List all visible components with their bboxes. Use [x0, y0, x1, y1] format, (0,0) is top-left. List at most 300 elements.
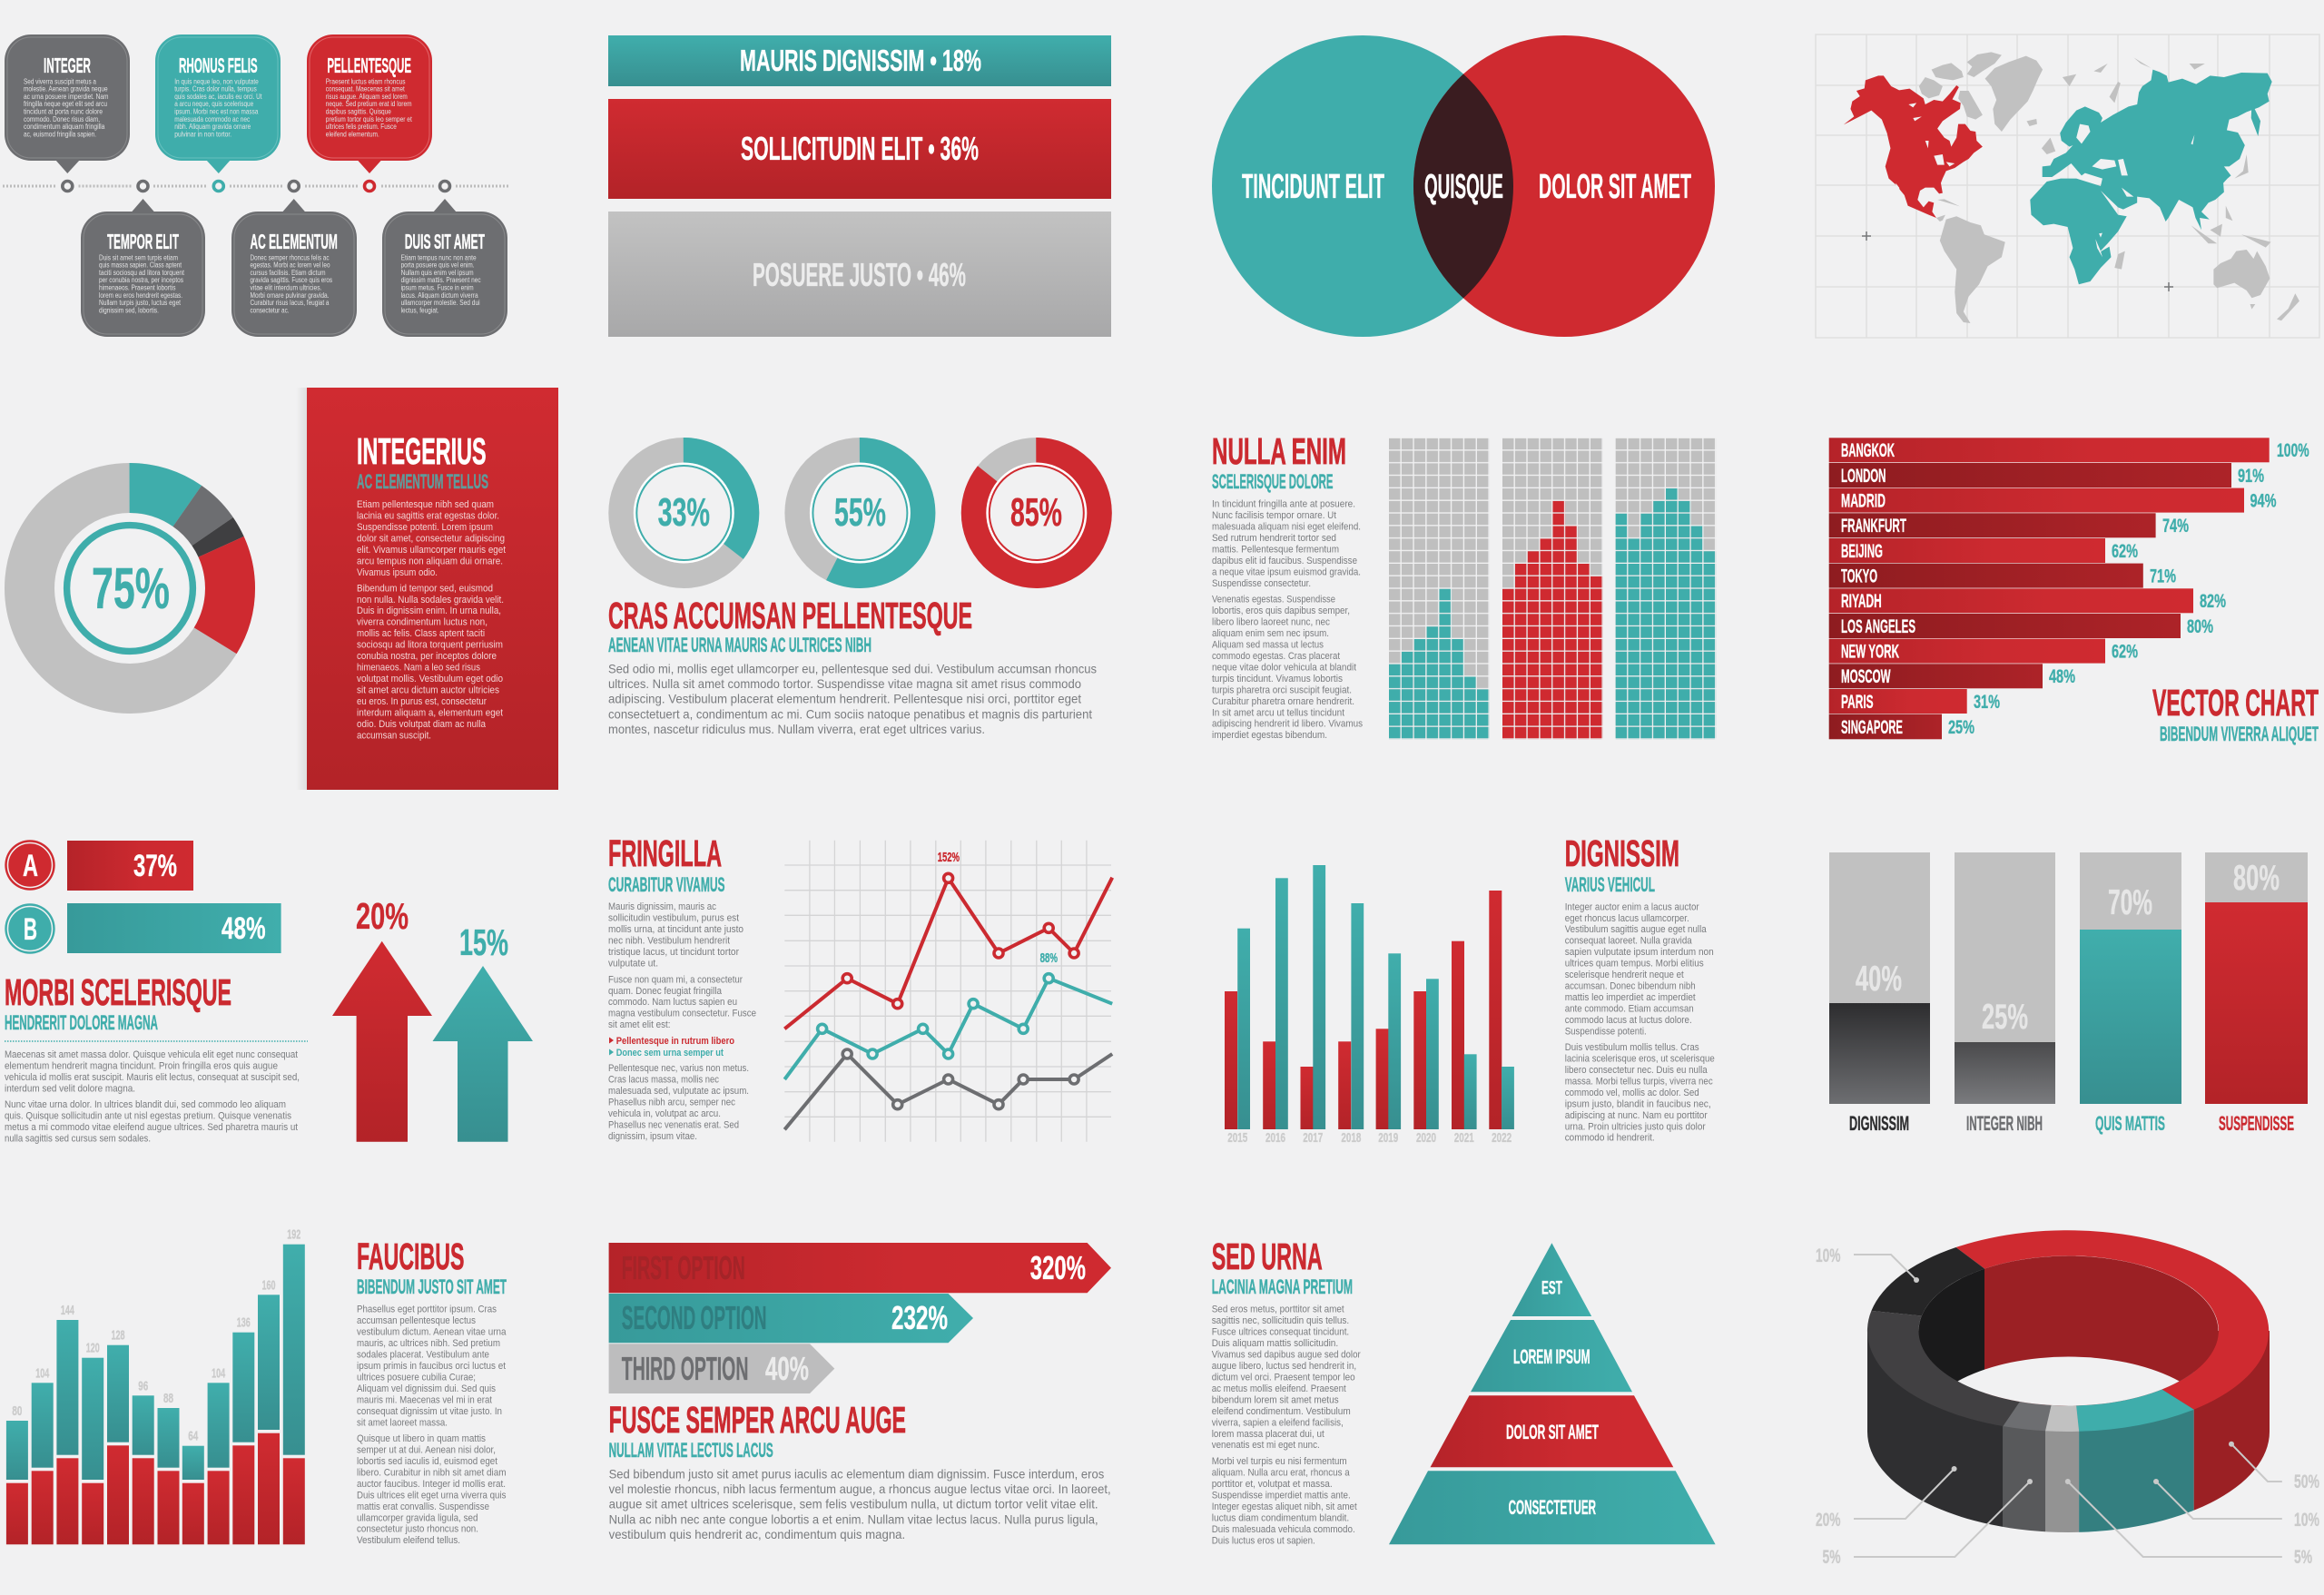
- bubble: integer: ac urna posuere imperdiet. Nam: [24, 93, 109, 101]
- text block: dignissim: eget rhoncus lacus ullamcorper.: [1565, 913, 1689, 924]
- bubble: ac elementum: cursus facilisis. Etiam dictum: [251, 269, 326, 277]
- column: integer nibh: [1955, 852, 2055, 1135]
- bubble: ac elementum: vitae elit interdum ultricies.: [251, 283, 321, 292]
- heading: dignissim: [1565, 832, 1679, 896]
- bubble: pellentesque: risus augue. Aliquam sed lorem: [326, 93, 408, 101]
- city labels: BEIJING: [1841, 541, 1883, 562]
- bubble: integer: ac, euismod fringilla sapien.: [24, 130, 96, 138]
- bubble: duis sit amet: lectus, feugiat.: [401, 306, 439, 314]
- stat bar: A: A: [23, 849, 38, 883]
- teal segments: [6, 1245, 305, 1480]
- ring inner wall and hole: [1919, 1256, 2219, 1405]
- panel: integerius red card: non nulla. Nulla sodales gravida velit.: [357, 595, 504, 606]
- bar: sollicitudin elit: [608, 99, 1111, 199]
- text block: cras accumsan: adipiscing. Vestibulum placerat elementum hendrerit. Pellentesque nisi orci, porttitor eget: [608, 692, 1081, 706]
- text block: faucibus: mattis erat convallis. Suspendisse: [357, 1501, 489, 1512]
- arrow bar: second option: 232%: [891, 1299, 948, 1336]
- bubble: pellentesque: dapibus sagittis. Quisque: [326, 107, 391, 116]
- bubble: pellentesque: eleifend elementum.: [326, 130, 379, 138]
- text block: dignissim: scelerisque hendrerit neque et: [1565, 970, 1684, 980]
- text block: dignissim: consequat laoreet. Nulla gravida: [1565, 936, 1692, 947]
- text block: faucibus: sodales placerat. Vestibulum ante: [357, 1349, 489, 1360]
- value labels: 128: [111, 1328, 125, 1344]
- bubble: tempor elit: [81, 199, 205, 337]
- value labels: 160: [261, 1277, 276, 1293]
- text block: cras accumsan: consectetuert a, condimentum ac mi. Cum sociis natoque penatibus et magnis dis parturient: [608, 706, 1092, 721]
- stat bar: A: [5, 840, 193, 891]
- panel: integerius red card: AC ELEMENTUM TELLUS: [357, 470, 488, 493]
- bubble: pellentesque: neque. Sed pretium erat id lorem: [326, 100, 412, 108]
- text block: fusce semper: augue sit amet ultrices scelerisque, sem felis vestibulum nulla, ut dictum tortor velit vitae elit.: [609, 1497, 1098, 1511]
- city labels: SINGAPORE: [1841, 717, 1903, 738]
- callout: 152%: 152%: [938, 850, 960, 865]
- stat bar: B: 48%: [222, 911, 266, 946]
- teal bars: [1237, 865, 1514, 1129]
- text block: fringilla: tristique lacus, ut tincidunt tortor: [608, 947, 739, 958]
- bubble: pellentesque: ultrices felis pretium. Fusce: [326, 123, 397, 131]
- panel: integerius red card: sit amet arcu dictum auctor ultricies: [357, 684, 499, 695]
- arrow bar: third option: THIRD OPTION: [622, 1350, 748, 1387]
- text block: sed urna: Sed eros metus, porttitor sit amet: [1212, 1305, 1344, 1315]
- bubble: duis sit amet: dignissim mattis. Praesent nec: [401, 276, 481, 284]
- text block: dignissim: Integer auctor enim a lacus auctor: [1565, 901, 1699, 912]
- bubble: tempor elit: Duis sit amet sem turpis etiam: [99, 253, 178, 261]
- pyramid level: consectetuer: CONSECTETUER: [1509, 1496, 1596, 1519]
- panel: dignissim bar chart: [1225, 832, 1715, 1146]
- value labels: 25%: [1948, 717, 1974, 738]
- text block: dignissim: sapien vulputate ipsum interdum non: [1565, 947, 1714, 958]
- panel: percentage bars: [608, 35, 1111, 337]
- panel: integerius red card: accumsan suscipit.: [357, 730, 431, 741]
- pyramid level: consectetuer: [1389, 1471, 1716, 1544]
- pyramid level: lorem ipsum: [1471, 1320, 1632, 1392]
- bubble: tempor elit: dignissim sed, lobortis.: [99, 306, 159, 314]
- city labels: NEW YORK: [1841, 642, 1899, 663]
- text block: nulla enim: turpis tincidunt. Vivamus lobortis: [1212, 674, 1343, 684]
- column: quis mattis: [2080, 852, 2181, 1135]
- arrow: red 20%: [332, 895, 432, 1142]
- red bars: [1225, 891, 1502, 1129]
- panel: three percentage donuts: [608, 450, 1099, 736]
- text block: faucibus: sit amet laoreet massa.: [357, 1417, 448, 1428]
- text block: dignissim: ultrices quam tempus. Morbi elitius: [1565, 959, 1704, 970]
- leader lines and labels: [1854, 1255, 2282, 1557]
- panel: 3D ring chart: 10%: [1816, 1245, 1841, 1266]
- red segments: [6, 1433, 305, 1544]
- panel: integerius red card: [296, 388, 558, 790]
- bar: posuere justo: POSUERE JUSTO • 46%: [753, 256, 966, 293]
- bar: mauris dignissim: [608, 35, 1111, 86]
- heading: nulla enim: NULLA ENIM: [1212, 430, 1346, 472]
- bubble: duis sit amet: lacus. Aliquam dictum viverra: [401, 291, 478, 300]
- text block: cras accumsan: Sed odio mi, mollis eget ullamcorper eu, pellentesque sed dui. Vestibulum accumsan rhoncus: [608, 661, 1097, 675]
- value labels: 62%: [2112, 642, 2138, 663]
- text block: fringilla: magna vestibulum consectetur. Fusce: [608, 1009, 756, 1019]
- text block: fringilla: Fusce non quam mi, a consectetur: [608, 974, 743, 985]
- text block: dignissim: Suspendisse potenti.: [1565, 1026, 1647, 1037]
- panel: integerius red card: eu eros. In purus est, consectetur: [357, 696, 487, 707]
- bubble: rhonus felis: [155, 34, 281, 173]
- text block: faucibus: ultrices posuere cubilia Curae;: [357, 1372, 476, 1383]
- text block: dignissim: accumsan. Donec bibendum nibh: [1565, 981, 1696, 992]
- bubble: duis sit amet: porta posuere quis vel enim.: [401, 261, 475, 270]
- text block: sed urna: porttitor et, volutpat et massa.: [1212, 1479, 1333, 1490]
- text block: nulla enim: turpis pharetra orci suscipit feugiat.: [1212, 684, 1352, 695]
- text block: morbi scelerisque: metus a mi commodo vitae eleifend augue ultrices. Sed pharetra mauris ut: [5, 1122, 298, 1133]
- text block: cras accumsan: ultrices. Nulla sit amet commodo tortor. Suspendisse vitae magna sit amet risus commodo: [608, 676, 1081, 691]
- text block: nulla enim: lobortis, eros quis dapibus semper,: [1212, 606, 1350, 616]
- column: suspendisse: [2205, 852, 2308, 1135]
- bars: [1829, 438, 2270, 739]
- text block: fringilla: sollicitudin vestibulum, purus est: [608, 913, 739, 924]
- column: integer nibh: 25%: [1982, 998, 2028, 1037]
- text block: faucibus: libero. Curabitur in nibh sit amet diam: [357, 1467, 507, 1478]
- panel: integerius red card: volutpat mollis. Vestibulum eget odio: [357, 674, 503, 684]
- text block: nulla enim: Suspendisse consectetur.: [1212, 578, 1311, 589]
- bubble: integer: condimentum aliquam fringilla: [24, 123, 105, 131]
- year labels: 2020: [1416, 1130, 1436, 1146]
- panel: integerius red card: Bibendum id tempor sed, euismod: [357, 583, 493, 594]
- text block: morbi scelerisque: vehicula id mollis erat suscipit. Mauris elit lectus, consequat at suscipit sed,: [5, 1072, 300, 1083]
- pixel chart: red high: [1502, 438, 1603, 740]
- city labels: MADRID: [1841, 491, 1886, 512]
- text block: faucibus: semper ut at dui. Aenean nisi dolor,: [357, 1445, 496, 1456]
- text block: fringilla: nec nibh. Vestibulum hendrerit: [608, 935, 730, 946]
- value labels: 104: [35, 1365, 50, 1381]
- callout: 88%: 88%: [1040, 950, 1058, 966]
- text block: nulla enim: mattis. Pellentesque fermentum: [1212, 545, 1339, 556]
- bubble: rhonus felis: nibh. Aliquam gravida ornare: [174, 123, 251, 131]
- value labels: 82%: [2200, 591, 2226, 612]
- bubble: tempor elit: himenaeos. Praesent lobortis: [99, 283, 176, 292]
- column: integer nibh: INTEGER NIBH: [1966, 1112, 2043, 1135]
- pyramid level: est: [1512, 1243, 1591, 1316]
- city labels: PARIS: [1841, 692, 1874, 713]
- city labels: RIYADH: [1841, 591, 1882, 612]
- heading: morbi scelerisque: MORBI SCELERISQUE: [5, 971, 231, 1013]
- text block: morbi scelerisque: nulla sagittis sed cursus sem sodales.: [5, 1133, 151, 1144]
- text block: morbi scelerisque: elementum hendrerit magna tincidunt. Proin fringilla eros quis augue: [5, 1060, 278, 1071]
- heading: fringilla: [608, 832, 724, 896]
- text block: dignissim: massa. Morbi tellus turpis, viverra nec: [1565, 1076, 1713, 1087]
- column: dignissim: 40%: [1856, 960, 1902, 999]
- value labels: 48%: [2049, 666, 2075, 687]
- text block: fusce semper: Nulla ac nibh nec ante congue lobortis a et enim. Nullam vitae lectus lacus. Nulla purus ligula,: [609, 1511, 1098, 1526]
- text block: morbi scelerisque: interdum sed velit dolore magna.: [5, 1083, 135, 1094]
- text block: fringilla: Mauris dignissim, mauris ac: [608, 901, 716, 912]
- bubble: duis sit amet: Nullam quis enim vel ipsum: [401, 269, 474, 277]
- city labels: LONDON: [1841, 466, 1886, 487]
- text block: sed urna: sagittis nec, sollicitudin quis tellus.: [1212, 1315, 1349, 1326]
- text block: fringilla: Cras lacus massa, mollis nec: [608, 1075, 719, 1086]
- heading: cras accumsan: CRAS ACCUMSAN PELLENTESQUE: [608, 595, 972, 636]
- text block: nulla enim: malesuada aliquam nisi eget eleifend.: [1212, 521, 1361, 532]
- arrow bar: first option: [609, 1243, 1111, 1293]
- value labels: 88: [163, 1391, 173, 1406]
- text block: fringilla: vulputate ut.: [608, 958, 658, 969]
- panel: 75% donut chart: 75%: [92, 556, 170, 621]
- text block: nulla enim: commodo egestas. Cras placerat: [1212, 651, 1340, 662]
- text block: fusce semper: Sed bibendum justo sit amet purus iaculis ac elementum diam dignissim. Fusce interdum, eros: [609, 1466, 1104, 1481]
- value labels: 144: [61, 1303, 74, 1318]
- bubble: integer: molestie. Aenean gravida neque: [24, 85, 108, 94]
- panel: venn diagram: DOLOR SIT AMET: [1539, 168, 1691, 206]
- donut: 85%: [974, 450, 1099, 576]
- bubble: duis sit amet: ipsum metus. Fusce in enim: [401, 283, 474, 292]
- bubble: ac elementum: [231, 199, 357, 337]
- bar: sollicitudin elit: SOLLICITUDIN ELIT • 36%: [741, 130, 979, 167]
- panel: 75% donut chart: [29, 488, 231, 688]
- bubble: rhonus felis: a arcu neque, quis scelerisque: [174, 100, 254, 108]
- column: quis mattis: QUIS MATTIS: [2095, 1112, 2165, 1135]
- ring top face: [1867, 1230, 2269, 1432]
- text block: fringilla: quam. Donec feugiat fringilla: [608, 986, 723, 997]
- text block: sed urna: bibendum lorem sit amet metus: [1212, 1394, 1339, 1405]
- value labels: 64: [188, 1429, 199, 1444]
- bubble: duis sit amet: DUIS SIT AMET: [405, 230, 485, 253]
- column: suspendisse: 80%: [2233, 859, 2280, 898]
- heading: fusce semper: FUSCE SEMPER ARCU AUGE: [609, 1399, 906, 1441]
- text block: fringilla: [608, 901, 756, 1142]
- bubble: rhonus felis: RHONUS FELIS: [179, 54, 258, 77]
- panel: 3D ring chart: [1816, 1230, 2319, 1568]
- donut: 55%: 55%: [834, 490, 886, 535]
- year labels: 2022: [1492, 1130, 1512, 1146]
- arrow bar: third option: 40%: [765, 1350, 809, 1387]
- text block: faucibus: Quisque ut libero in quam mattis: [357, 1433, 486, 1444]
- panel: integerius red card: Duis in dignissim enim. In urna nulla,: [357, 606, 501, 616]
- text block: nulla enim: neque vitae dolor vehicula at blandit: [1212, 662, 1356, 673]
- text block: faucibus: [357, 1305, 507, 1546]
- text block: fringilla: sit amet elit est:: [608, 1019, 670, 1030]
- text block: faucibus: Vestibulum eleifend tellus.: [357, 1535, 460, 1546]
- pixel chart: teal low: [1389, 438, 1490, 740]
- panel: percentage columns: [1829, 852, 2308, 1135]
- panel: integerius red card: elit. Vivamus ullamcorper mauris eget: [357, 545, 506, 556]
- text block: dignissim: Vestibulum sagittis augue eget nulla: [1565, 924, 1707, 935]
- stat bar: A: 37%: [133, 849, 177, 883]
- text block: fringilla: commodo. Nam luctus sapien eu: [608, 997, 737, 1008]
- text block: nulla enim: Venenatis egestas. Suspendisse: [1212, 595, 1335, 606]
- panel: 3D ring chart: 5%: [1823, 1547, 1841, 1568]
- ring side wall: [1867, 1331, 2270, 1532]
- text block: faucibus: auctor faucibus. Integer id mollis erat.: [357, 1479, 506, 1490]
- heading: faucibus: BIBENDUM JUSTO SIT AMET: [357, 1275, 507, 1298]
- bubble: tempor elit: taciti sociosqu ad litora torquent: [99, 269, 185, 277]
- text block: faucibus: mauris mi. Maecenas vel mi in erat: [357, 1394, 492, 1405]
- bubble: ac elementum: consectetur ac.: [251, 306, 289, 314]
- map grid: [1816, 34, 2319, 338]
- heading: faucibus: FAUCIBUS: [357, 1236, 464, 1277]
- text block: fringilla: Pellentesque nec, varius non metus.: [608, 1063, 749, 1074]
- panel: venn diagram: TINCIDUNT ELIT: [1242, 168, 1384, 206]
- text block: sed urna: viverra, sapien a eleifend facilisis,: [1212, 1417, 1344, 1428]
- legend: teal item: Donec sem urna semper ut: [616, 1048, 724, 1058]
- panel: venn diagram: [1212, 35, 1715, 337]
- text block: sed urna: Vivamus sed dapibus augue sed dolor: [1212, 1349, 1361, 1360]
- heading: fringilla: FRINGILLA: [608, 832, 722, 874]
- panel: speech bubble timeline: [3, 34, 509, 337]
- panel: 3D ring chart: 5%: [2294, 1547, 2312, 1568]
- text block: nulla enim: adipiscing hendrerit id libero. Vivamus: [1212, 719, 1363, 730]
- value labels: 74%: [2162, 516, 2189, 537]
- value labels: 80: [12, 1403, 22, 1419]
- bubble: tempor elit: per conubia nostra, per inceptos: [99, 276, 183, 284]
- pixel chart: teal high: [1616, 438, 1716, 740]
- heading: cras accumsan: AENEAN VITAE URNA MAURIS AC ULTRICES NIBH: [608, 634, 872, 656]
- donut: 33%: [621, 450, 746, 576]
- bubble: pellentesque: PELLENTESQUE: [327, 54, 411, 77]
- bubble: integer: commodo. Donec risus diam,: [24, 115, 100, 123]
- panel: integerius red card: sociosqu ad litora torquent perriusim: [357, 640, 503, 651]
- text block: dignissim: commodo lacus at luctus dolore.: [1565, 1015, 1692, 1026]
- value labels: 71%: [2150, 566, 2176, 587]
- pyramid level: dolor sit amet: DOLOR SIT AMET: [1506, 1421, 1599, 1443]
- heading: nulla enim: SCELERISQUE DOLORE: [1212, 470, 1333, 493]
- bubble: ac elementum: Donec semper rhoncus felis ac: [251, 253, 329, 261]
- bubble: pellentesque: Praesent luctus etiam rhoncus: [326, 77, 405, 85]
- text block: sed urna: aliquam. Nulla arcu erat, rhoncus a: [1212, 1467, 1350, 1478]
- text block: nulla enim: [1212, 499, 1363, 741]
- arrow: teal 15%: [432, 921, 533, 1142]
- series: teal line: [784, 974, 1112, 1079]
- panel: integerius red card: interdum aliquam a, elementum eget: [357, 707, 503, 718]
- bubble: ac elementum: gravida sagittis. Fusce quis eros: [251, 276, 332, 284]
- panel: integerius red card: lacinia eu sagittis erat egestas dolor.: [357, 510, 499, 521]
- panel: vector chart horizontal bars: [1829, 438, 2319, 745]
- text block: faucibus: ullamcorper gravida ligula, sed: [357, 1512, 478, 1523]
- panel: option arrows: [609, 1243, 1111, 1541]
- column: quis mattis: 70%: [2108, 883, 2152, 922]
- text block: faucibus: lobortis sed iaculis id, euismod eget: [357, 1456, 497, 1467]
- city labels: [1841, 440, 1915, 738]
- year labels: 2018: [1341, 1130, 1361, 1146]
- text block: sed urna: Duis aliquam mattis sollicitudin.: [1212, 1338, 1338, 1349]
- panel: sed urna pyramid: [1212, 1236, 1716, 1546]
- pyramid level: dolor sit amet: [1431, 1395, 1673, 1467]
- heading: dignissim: DIGNISSIM: [1565, 832, 1679, 874]
- text block: morbi scelerisque: quis. Quisque sollicitudin ante ut nisl egestas pretium. Quisque venenatis: [5, 1111, 291, 1122]
- bubble: tempor elit: Nullam turpis justo, luctus eget: [99, 299, 182, 307]
- bubble: tempor elit: quis massa sapien. Class aptent: [99, 261, 182, 270]
- value labels: 62%: [2112, 541, 2138, 562]
- legend: red item: Pellentesque in rutrum libero: [616, 1036, 734, 1047]
- text block: fringilla: Phasellus nec venenatis erat. Sed: [608, 1119, 739, 1130]
- bubble: integer: INTEGER: [44, 54, 91, 77]
- text block: fringilla: dignissim, ipsum vitae.: [608, 1131, 697, 1142]
- heading: fusce semper: NULLAM VITAE LECTUS LACUS: [609, 1439, 773, 1462]
- panel: integerius red card: viverra condimentum luctus non,: [357, 617, 487, 628]
- text block: dignissim: libero consectetur nec. Duis eu nulla: [1565, 1065, 1708, 1076]
- bubble: ac elementum: egestas. Morbi ac lorem vel leo: [251, 261, 330, 270]
- text block: fringilla: Phasellus nibh arcu, semper nec: [608, 1097, 735, 1108]
- series: gray line: [784, 1049, 1112, 1129]
- bubble: ac elementum: Morbi ornare pulvinar gravida.: [251, 291, 329, 300]
- year labels: 2021: [1454, 1130, 1474, 1146]
- panel: integerius red card: dolor sit amet, consectetur adipiscing: [357, 533, 505, 544]
- arrow bar: second option: SECOND OPTION: [622, 1299, 766, 1336]
- value labels: 104: [212, 1365, 225, 1381]
- column: dignissim: [1829, 852, 1930, 1135]
- panel: fringilla line chart: [608, 832, 1112, 1142]
- donut: 55%: [797, 450, 922, 576]
- text block: fringilla: malesuada sed, vulputate ac ipsum.: [608, 1086, 749, 1097]
- text block: dignissim: mattis leo imperdiet ac imperdiet: [1565, 992, 1696, 1003]
- panel: integerius red card: arcu tempus non aliquam dui ornare.: [357, 556, 503, 566]
- arrow: red 20%: 20%: [356, 895, 409, 937]
- heading: morbi scelerisque: HENDRERIT DOLORE MAGNA: [5, 1011, 158, 1034]
- column: dignissim: DIGNISSIM: [1849, 1112, 1909, 1135]
- text block: sed urna: eleifend condimentum. Vestibulum: [1212, 1406, 1351, 1417]
- heading: sed urna: SED URNA: [1212, 1236, 1323, 1277]
- text block: dignissim: lacinia scelerisque eros, ut scelerisque: [1565, 1053, 1715, 1064]
- text block: dignissim: Duis vestibulum mollis tellus. Cras: [1565, 1042, 1699, 1053]
- text block: faucibus: Duis ultrices elit eget urna viverra quis: [357, 1490, 507, 1501]
- map crosshair markers: [1862, 231, 2173, 291]
- bubble: rhonus felis: pulvinar in non tortor.: [174, 130, 231, 138]
- panel: faucibus stacked bars: [6, 1227, 507, 1546]
- panel: integerius red card: Suspendisse potenti. Lorem ipsum: [357, 522, 493, 533]
- panel: 3D ring chart: 20%: [1816, 1510, 1841, 1531]
- text block: faucibus: mauris, ac ultrices nibh. Sed pretium: [357, 1338, 500, 1349]
- value labels: 94%: [2250, 491, 2277, 512]
- panel: integerius red card: Vivamus ipsum odio.: [357, 567, 438, 578]
- text block: sed urna: Morbi vel turpis eu nisi fermentum: [1212, 1456, 1347, 1467]
- text block: sed urna: Suspendisse imperdiet mattis ante.: [1212, 1490, 1351, 1501]
- bubble: rhonus felis: ipsum. Morbi nec est non massa: [174, 107, 259, 116]
- donut: 33%: 33%: [658, 490, 710, 535]
- heading: sed urna: LACINIA MAGNA PRETIUM: [1212, 1275, 1353, 1298]
- value labels: 96: [138, 1378, 148, 1393]
- text block: faucibus: vestibulum dictum. Aenean vitae urna: [357, 1327, 507, 1338]
- arrow bar: first option: 320%: [1030, 1249, 1086, 1286]
- bubble: integer: [5, 34, 130, 173]
- value labels: 120: [86, 1341, 100, 1356]
- pyramid level: lorem ipsum: LOREM IPSUM: [1513, 1345, 1590, 1368]
- text block: sed urna: Duis malesuada vehicula commodo.: [1212, 1524, 1355, 1535]
- text block: morbi scelerisque: [5, 1049, 300, 1144]
- panel: nulla enim pixel charts: [1212, 430, 1716, 741]
- text block: nulla enim: aliquam enim sem nec ipsum.: [1212, 628, 1329, 639]
- bubble: ac elementum: AC ELEMENTUM: [251, 230, 338, 253]
- text block: fusce semper: vestibulum quis hendrerit ac, condimentum quis magna.: [609, 1527, 905, 1541]
- text block: dignissim: commodo id hendrerit.: [1565, 1133, 1655, 1144]
- panel: world map: [1816, 34, 2319, 338]
- bubble: rhonus felis: quis sodales ac, iaculis eu orci. Ut: [174, 93, 262, 101]
- stat bar: B: B: [24, 912, 37, 947]
- heading: cras accumsan: [608, 595, 972, 656]
- text block: nulla enim: dapibus elit id faucibus. Suspendisse: [1212, 556, 1357, 566]
- bubble: integer: Sed viverra suscipit metus a: [24, 77, 96, 85]
- text block: sed urna: luctus diam condimentum blandit.: [1212, 1512, 1349, 1523]
- text block: sed urna: Duis luctus eros ut sapien.: [1212, 1535, 1315, 1546]
- text block: fusce semper: [609, 1466, 1111, 1541]
- text block: fusce semper: vel molestie rhoncus, nibh lacus fermentum augue, a rhoncus augue lectus vitae orci. In laoreet,: [609, 1482, 1111, 1496]
- text block: morbi scelerisque: Maecenas sit amet massa dolor. Quisque vehicula elit eget nunc consequat: [5, 1049, 298, 1060]
- panel: integerius red card: himenaeos. Nam a leo sed risus: [357, 663, 480, 674]
- bubble: ac elementum: Curabitur risus lacus, feugiat a: [251, 299, 330, 307]
- heading: nulla enim: [1212, 430, 1346, 493]
- text block: sed urna: venenatis est mi eget nunc.: [1212, 1440, 1320, 1451]
- bubble: rhonus felis: turpis. Cras dolor nulla, tempus: [174, 85, 257, 94]
- panel: venn diagram: QUISQUE: [1424, 168, 1503, 206]
- text block: nulla enim: In sit amet arcu ut tellus tincidunt: [1212, 707, 1344, 718]
- bubble: duis sit amet: [382, 199, 507, 337]
- continents: [1844, 52, 2299, 323]
- text block: nulla enim: In tincidunt fringilla ante at posuere.: [1212, 499, 1355, 510]
- panel: integerius red card: Etiam pellentesque nibh sed quam: [357, 499, 494, 510]
- text block: dignissim: ipsum justo, blandit in faucibus nec,: [1565, 1098, 1711, 1109]
